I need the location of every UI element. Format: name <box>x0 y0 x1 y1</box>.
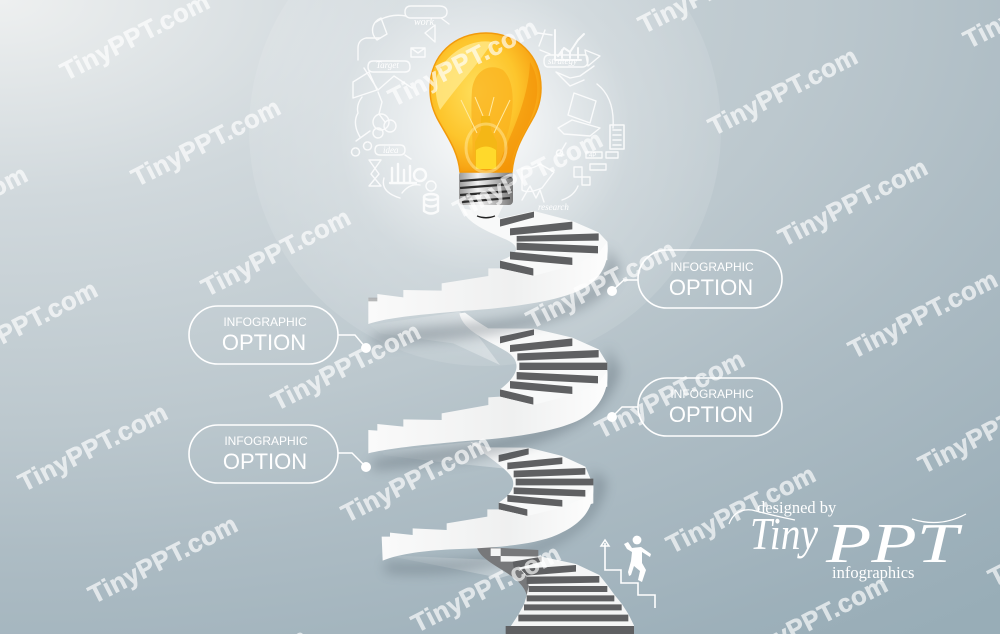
watermark: repeated TinyPPT.com: TinyPPT.com <box>704 42 863 142</box>
highlight <box>436 41 492 110</box>
callout: lower left option <box>189 425 371 483</box>
flight 3 <box>382 441 593 561</box>
callout: top right option: INFOGRAPHIC <box>670 260 754 274</box>
watermark: repeated TinyPPT.com: TinyPPT.com <box>384 13 543 113</box>
watermark: repeated TinyPPT.com: TinyPPT.com <box>522 235 681 335</box>
running person <box>624 536 651 582</box>
doodle captions: idea <box>383 145 399 155</box>
watermark: repeated TinyPPT.com: TinyPPT.com <box>844 265 1000 365</box>
doodle sketches around the bulb <box>352 6 624 214</box>
watermark: repeated TinyPPT.com: TinyPPT.com <box>337 429 496 529</box>
callout: lower left option: OPTION <box>223 449 307 474</box>
callout: lower left option: INFOGRAPHIC <box>224 434 308 448</box>
screw base <box>459 171 513 205</box>
rim shading <box>498 62 537 170</box>
halo circle behind the bulb <box>249 0 721 366</box>
callout: lower right option <box>607 378 782 436</box>
flight 1 shadow <box>372 245 620 345</box>
flight 1 <box>368 208 608 324</box>
glass outer <box>430 33 541 172</box>
designer credit logo: infographics <box>832 563 914 582</box>
bottom flight <box>477 547 634 634</box>
callout: upper left option <box>189 306 371 364</box>
designer credit logo <box>729 498 966 582</box>
watermark: repeated TinyPPT.com: TinyPPT.com <box>197 203 356 303</box>
watermark: repeated TinyPPT.com: TinyPPT.com <box>449 125 608 225</box>
doodle captions: work <box>414 17 435 28</box>
callout: upper left option: OPTION <box>222 330 306 355</box>
watermark: repeated TinyPPT.com: TinyPPT.com <box>14 398 173 498</box>
callout: lower right option: INFOGRAPHIC <box>670 387 754 401</box>
callout: upper left option: INFOGRAPHIC <box>223 315 307 329</box>
spiral staircase <box>368 208 634 634</box>
watermark: repeated TinyPPT.com: TinyPPT.com <box>267 317 426 417</box>
doodle captions: research <box>538 202 569 212</box>
flight 2 shadow <box>372 345 620 470</box>
climbing figure and arrow icon <box>601 536 655 608</box>
designer credit logo: Tiny <box>750 508 818 559</box>
designer credit logo: PPT <box>825 513 963 575</box>
flight 2 <box>368 312 608 453</box>
doodle captions <box>376 17 596 212</box>
filament <box>461 97 510 172</box>
watermark: repeated TinyPPT.com: TinyPPT.com <box>774 153 933 253</box>
light bulb <box>430 33 541 218</box>
doodle captions: 4P <box>589 153 596 159</box>
callout: lower right option: OPTION <box>669 402 753 427</box>
doodle captions: strategy <box>548 56 577 66</box>
bulb tip <box>468 204 504 218</box>
glass inner column <box>471 67 513 168</box>
flight 3 shadow and lower fade <box>384 470 606 578</box>
stair arrow <box>605 543 655 608</box>
watermark: repeated TinyPPT.com: TinyPPT.com <box>662 460 821 560</box>
watermark: repeated TinyPPT.com: TinyPPT.com <box>84 510 243 610</box>
watermark: repeated TinyPPT.com: TinyPPT.com <box>591 345 750 445</box>
bulb contact sliver <box>477 216 495 218</box>
designer credit logo: designed by <box>757 498 837 517</box>
doodle captions: Target <box>376 60 399 70</box>
callout: top right option <box>607 250 782 308</box>
callout: top right option: OPTION <box>669 275 753 300</box>
watermark: repeated TinyPPT.com: TinyPPT.com <box>127 93 286 193</box>
